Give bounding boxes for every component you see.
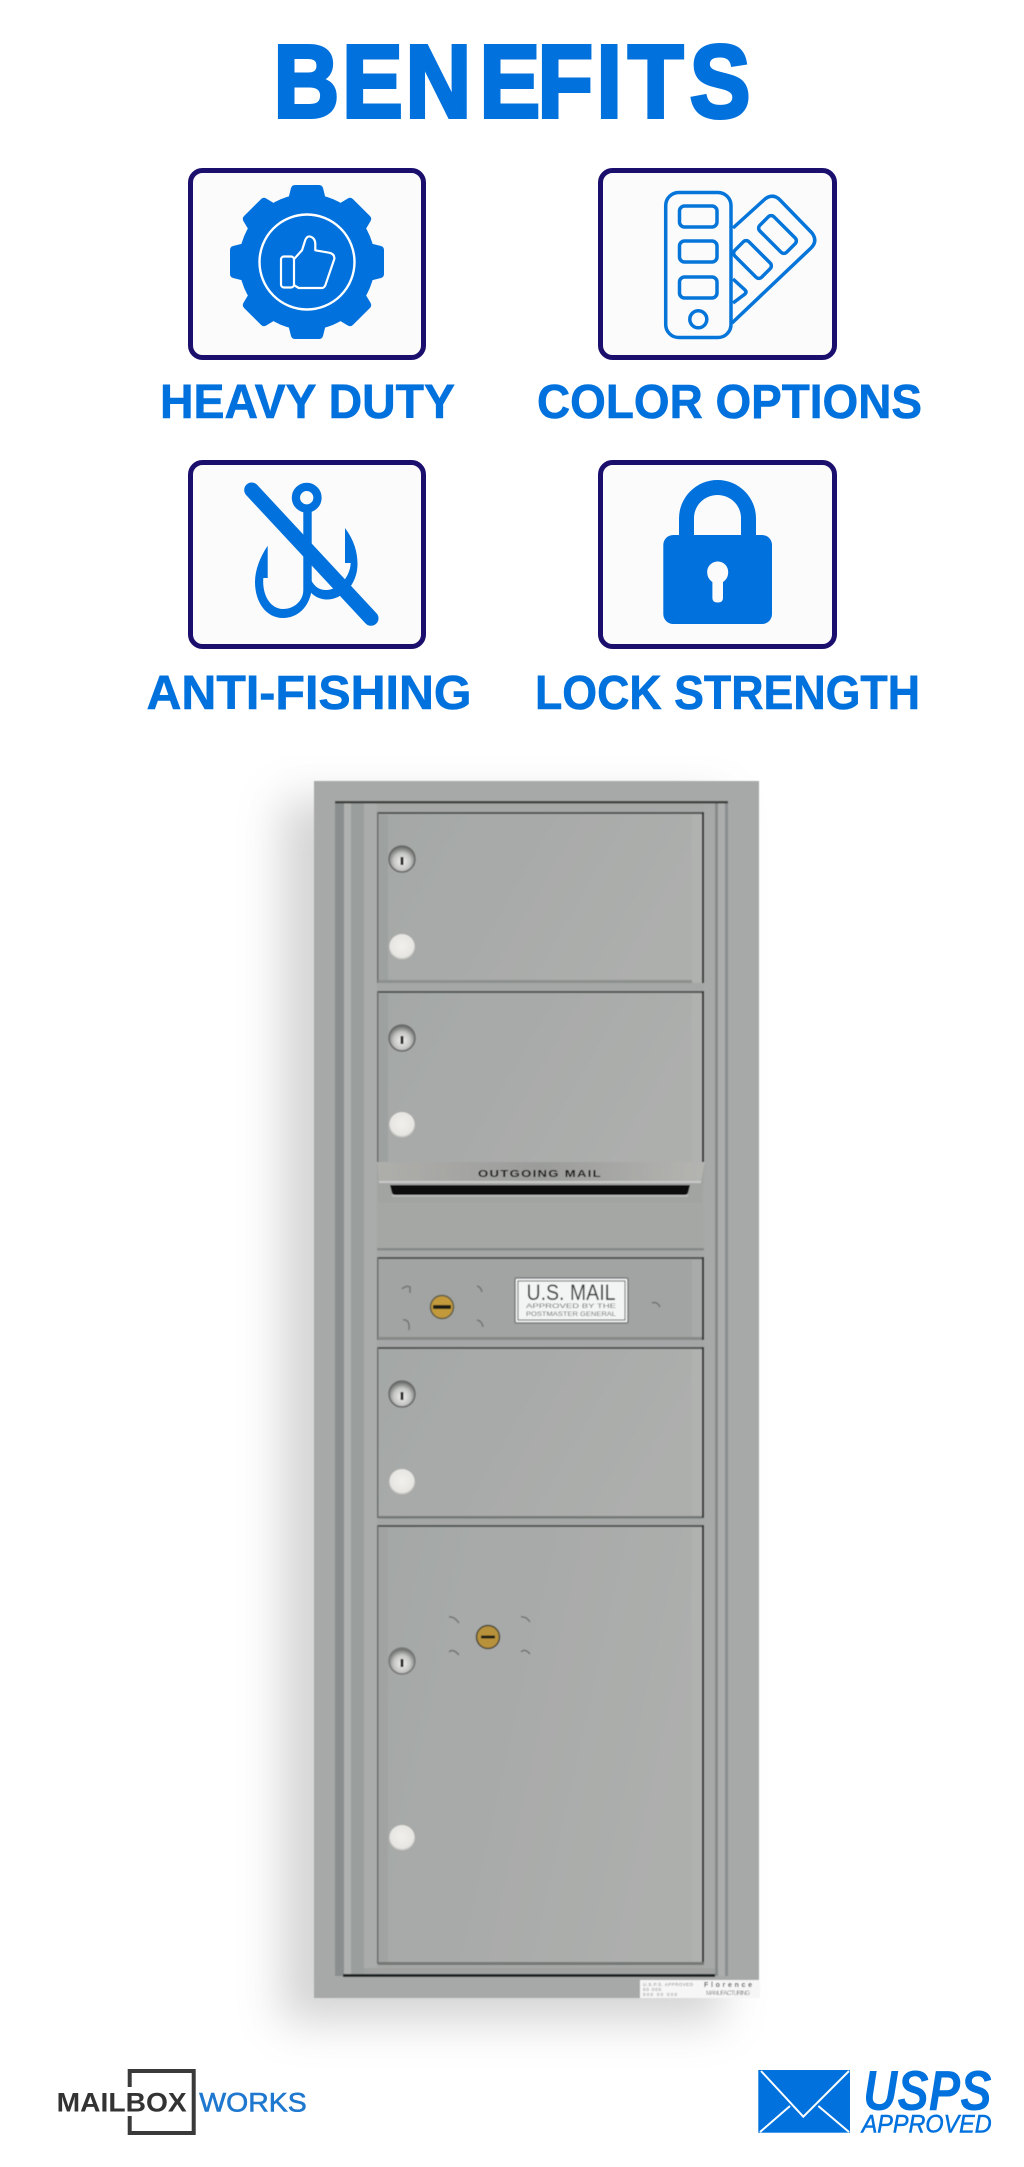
rivets xyxy=(402,1286,660,1330)
logo wordmark blue: WORKS xyxy=(199,2088,307,2118)
icon: padlock xyxy=(663,480,772,624)
door 3 lock xyxy=(389,1381,415,1407)
manufacturer label: U.S.P.S. APPROVED xyxy=(643,1982,694,1987)
U.S. Mail plate xyxy=(515,1278,628,1323)
brass lock xyxy=(430,1296,454,1318)
title: BENEFITS xyxy=(274,24,750,139)
manufacturer label: 00 000 xyxy=(643,1987,661,1992)
door 1 xyxy=(377,812,704,983)
logo: USPS approved xyxy=(758,2059,992,2139)
label: COLOR OPTIONS xyxy=(537,376,922,429)
parcel door rivets xyxy=(449,1617,530,1655)
panel: lock strength xyxy=(535,462,920,720)
card frame xyxy=(600,462,834,646)
logo wordmark dark: MAILBOX xyxy=(57,2088,187,2118)
label: LOCK STRENGTH xyxy=(535,667,920,720)
logo: Mailbox Works xyxy=(57,2071,307,2133)
manufacturer label xyxy=(640,1980,760,1998)
door 2 knob xyxy=(389,1112,415,1138)
icon: envelope xyxy=(758,2070,850,2133)
parcel door knob xyxy=(389,1825,415,1851)
label: ANTI-FISHING xyxy=(146,667,471,720)
label: HEAVY DUTY xyxy=(160,376,455,429)
panel: anti-fishing xyxy=(146,462,471,720)
door 2 xyxy=(377,991,704,1162)
door 1 lock xyxy=(389,846,415,872)
card frame xyxy=(190,462,424,646)
USPS wordmark: USPS xyxy=(863,2059,992,2123)
panel: color options xyxy=(537,170,922,429)
icon: gear with thumbs up xyxy=(230,185,384,339)
U.S. Mail plate: U.S. MAIL xyxy=(526,1280,616,1305)
mailbox unit xyxy=(314,781,760,1998)
icon: color swatches xyxy=(666,192,815,338)
card frame xyxy=(600,170,834,358)
manufacturer label: Florence xyxy=(704,1982,752,1989)
mailbox drop shadow xyxy=(282,800,722,2022)
logo box xyxy=(130,2071,194,2133)
U.S. Mail plate: APPROVED BY THE xyxy=(526,1303,617,1310)
outgoing mail label: OUTGOING MAIL xyxy=(478,1169,602,1180)
door 2 lock xyxy=(389,1025,415,1051)
icon: crossed fish hook xyxy=(252,487,371,618)
panel: heavy duty xyxy=(160,170,455,429)
inner recess xyxy=(335,801,728,1977)
door 3 knob xyxy=(389,1469,415,1495)
U.S. Mail plate: POSTMASTER GENERAL xyxy=(526,1311,616,1318)
outgoing mail slot panel xyxy=(377,1162,705,1250)
manufacturer label: MANUFACTURING xyxy=(706,1991,750,1997)
approved wordmark: APPROVED xyxy=(860,2112,992,2139)
door with postal plate xyxy=(377,1257,704,1340)
parcel door brass lock xyxy=(476,1626,500,1648)
manufacturer label: 000 00 000 xyxy=(643,1992,677,1997)
parcel door lock xyxy=(389,1648,415,1674)
door 3 xyxy=(377,1347,704,1518)
parcel door xyxy=(377,1525,704,1965)
outer frame xyxy=(314,781,759,1998)
door 1 knob xyxy=(389,934,415,960)
card frame xyxy=(190,170,424,358)
